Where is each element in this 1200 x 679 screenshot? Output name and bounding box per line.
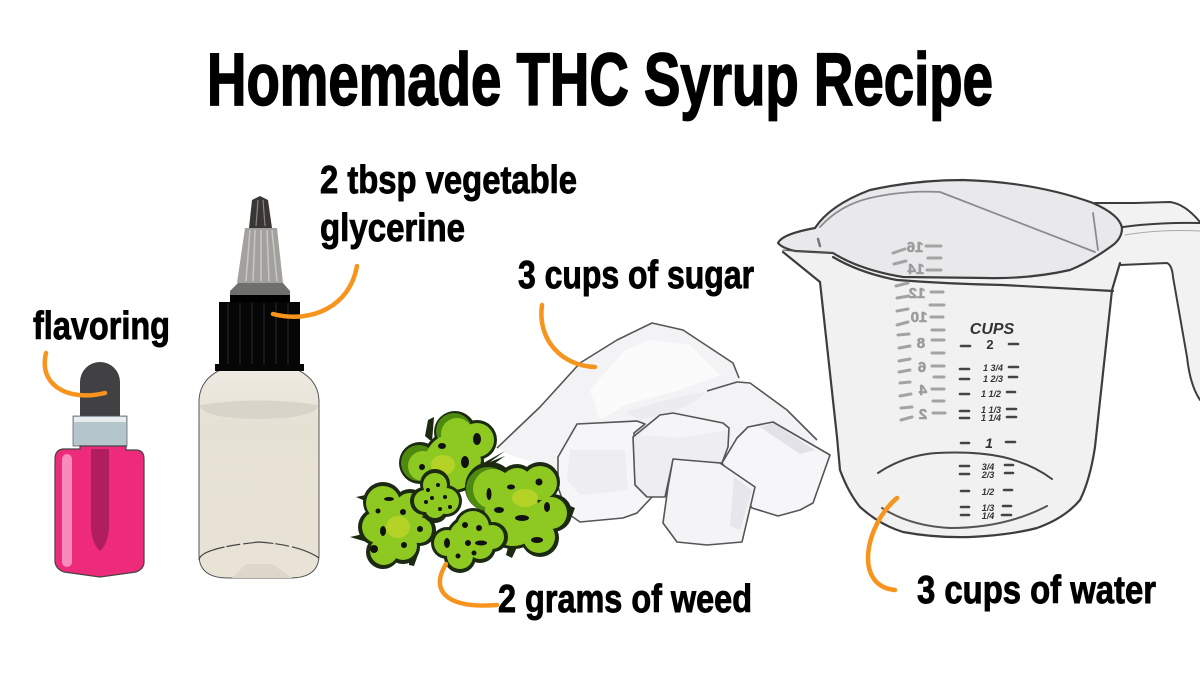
cups scale: CUPS [970,321,1015,338]
label: vegetable glycerine [320,159,577,250]
arrow: water [868,498,897,590]
icon: measuring cup: 16 [907,239,923,256]
icon: sugar pile [497,323,830,545]
cups scale [960,321,1018,521]
ounces scale, mirrored through the cup [893,246,945,420]
sugar cube left [558,421,652,522]
cups scale: 1 1/3 [981,405,1001,415]
cup rim [778,180,1122,278]
icon: cannabis buds [350,411,575,573]
bud left [350,482,436,569]
cups scale: 1/3 [982,503,994,513]
icon: measuring cup: 8 [917,335,925,352]
label: weed: 2 grams of weed [498,578,752,621]
sugar cube front [663,459,755,545]
bud small [410,469,462,523]
cup body [778,180,1122,537]
cups scale: 1/2 [982,487,994,497]
arrow: vegetable glycerine [273,266,357,317]
cups scale: 3/4 [982,462,994,472]
cups scale: 1 1/4 [981,413,1001,423]
icon: vegetable glycerine bottle [199,196,319,578]
icon: measuring cup: 12 [909,285,925,302]
sugar cube right [722,422,830,516]
cups scale: 1 [985,435,993,451]
icon: measuring cup: 6 [918,359,926,376]
cup base arcs [878,452,1052,479]
arrow: sugar [541,305,595,367]
bud top [399,411,505,493]
icon: measuring cup: 2 [919,406,927,423]
cups scale: 1 3/4 [983,363,1003,373]
label: flavoring: flavoring [33,305,170,348]
icon: flavoring dropper bottle [55,362,144,577]
cups scale: 2 [986,337,994,352]
label: vegetable glycerine: glycerine [320,207,465,250]
label: water: 3 cups of water [917,569,1156,612]
cups scale: 2/3 [981,470,994,480]
icon: measuring cup: 14 [907,261,924,278]
bud right [465,462,575,558]
cups scale: 1 2/3 [983,374,1003,384]
arrow: flavoring [45,353,105,395]
icon: measuring cup: 10 [911,309,927,326]
sugar mound [497,323,817,505]
icon: measuring cup [778,180,1200,537]
cups scale: 1 1/2 [981,389,1001,399]
bud specks [370,433,550,558]
bud bottom [431,508,508,573]
arrow: weed [440,564,497,606]
label: sugar: 3 cups of sugar [518,254,754,297]
cups scale: 1/4 [982,511,994,521]
label: vegetable glycerine: 2 tbsp vegetable [320,159,577,202]
icon: measuring cup: 4 [918,382,927,399]
cup handle [1095,202,1200,400]
sugar cube back [633,413,729,497]
